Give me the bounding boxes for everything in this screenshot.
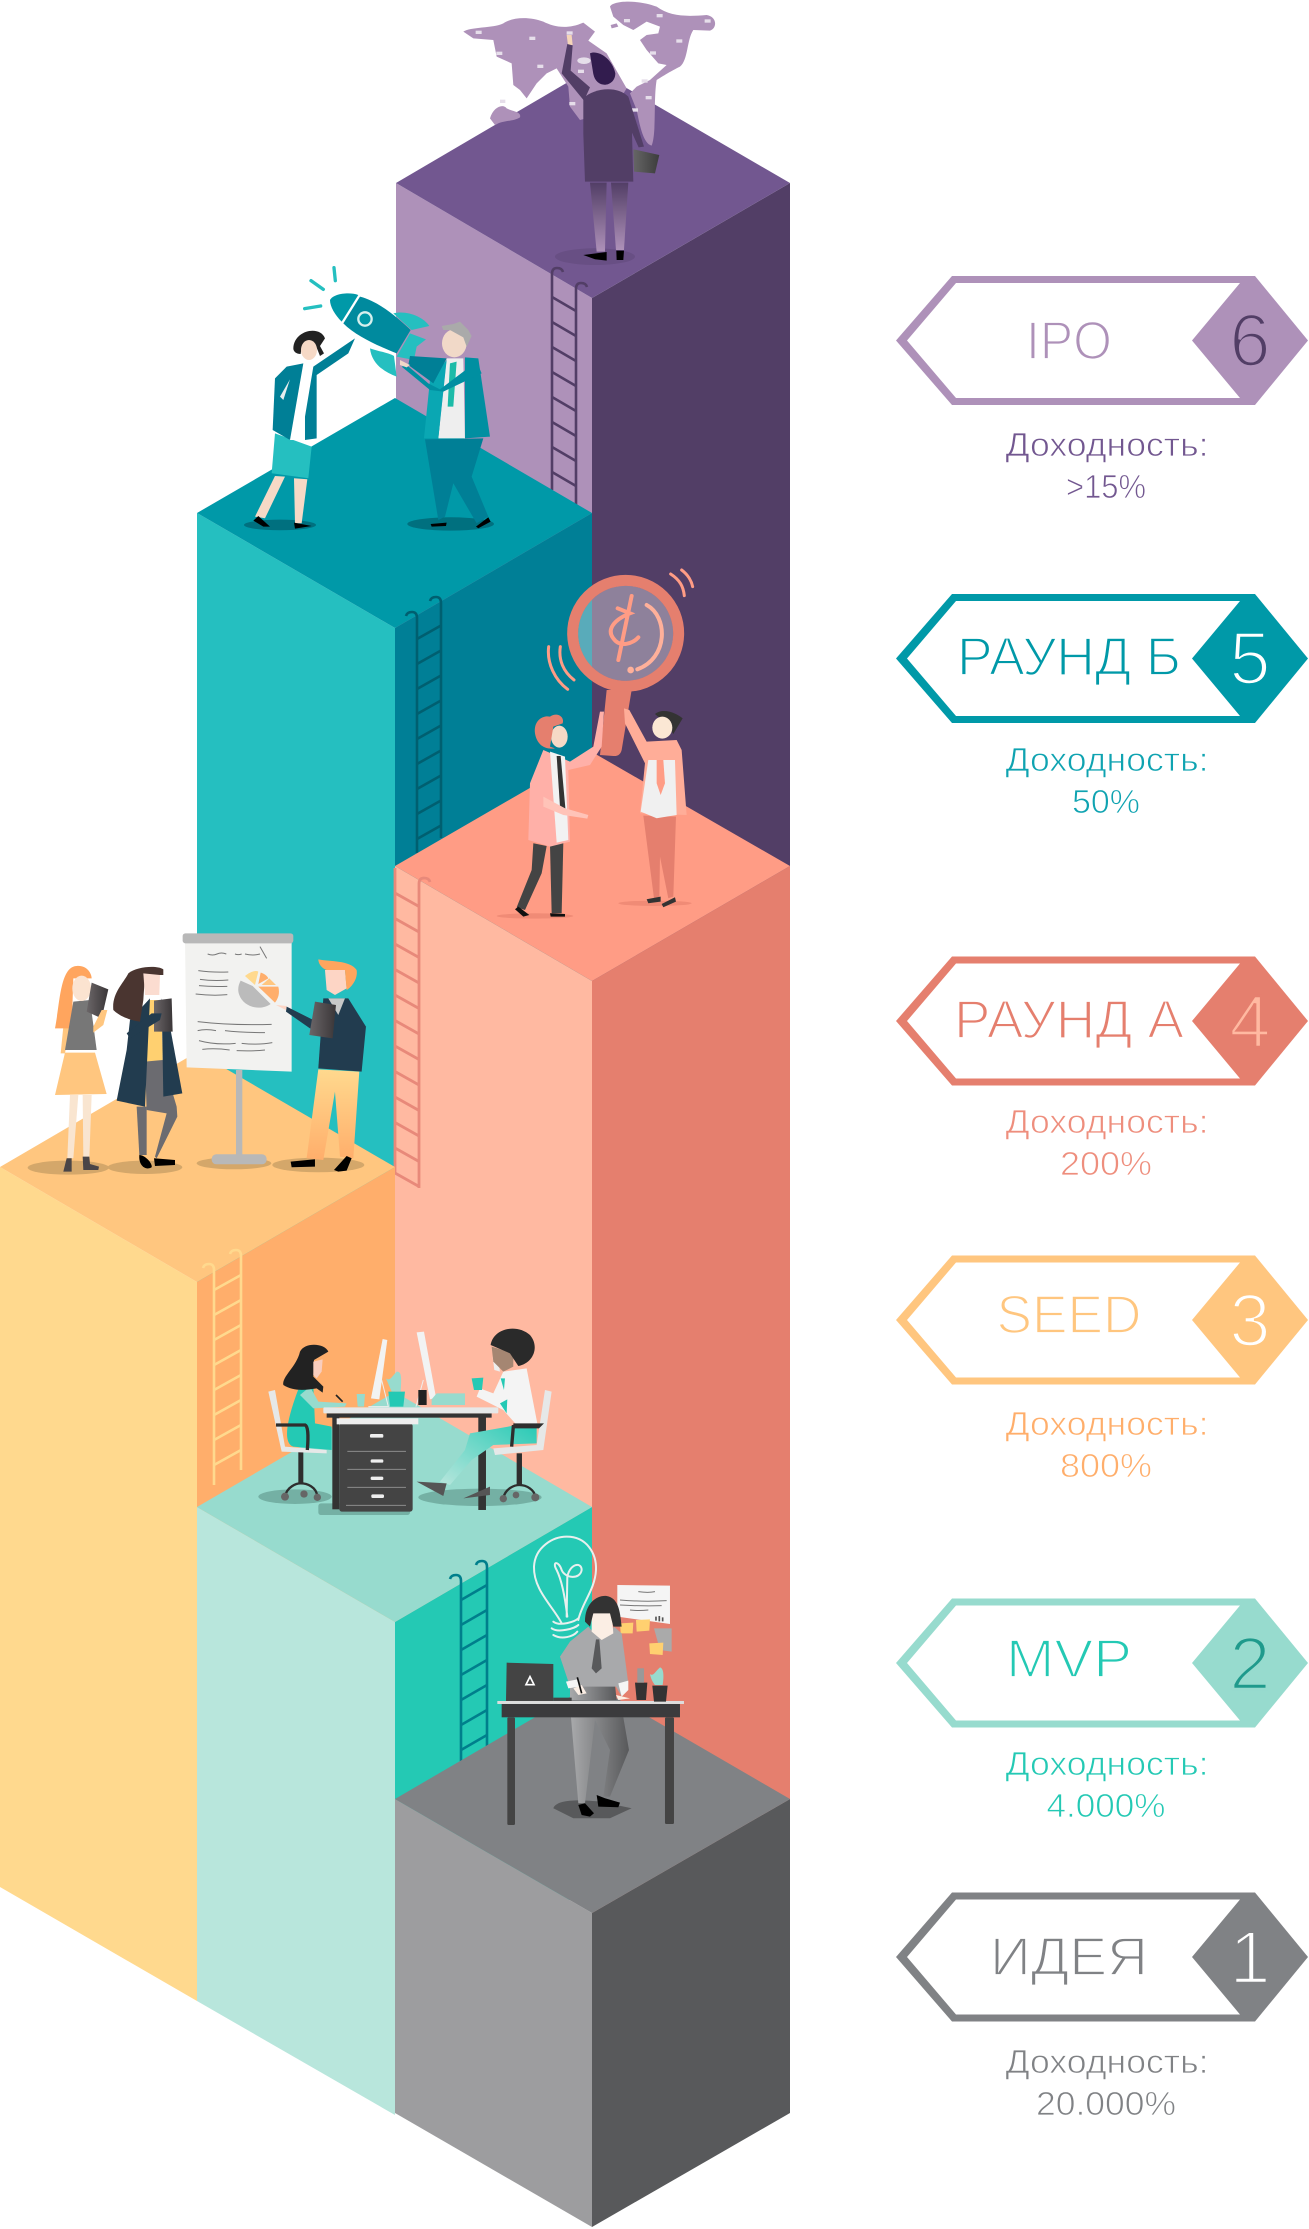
badge 3: seed bbox=[896, 1256, 1308, 1384]
return text: round B bbox=[1006, 741, 1208, 820]
illustration: team presentation on seed block bbox=[28, 933, 366, 1175]
return text: idea: Доходность: bbox=[1006, 2043, 1208, 2080]
badge 5: round B bbox=[896, 594, 1308, 723]
return text: round A: Доходность: bbox=[1006, 1103, 1208, 1140]
badge 2: MVP bbox=[896, 1598, 1308, 1728]
ground shadows bbox=[28, 1157, 364, 1175]
woman figure bbox=[555, 35, 659, 265]
man standing at desk bbox=[560, 1596, 630, 1817]
wall notes bbox=[617, 1585, 672, 1655]
badge 5: round B: 5 bbox=[1229, 617, 1271, 700]
badge 1: idea: 1 bbox=[1229, 1916, 1271, 1999]
badge 6: IPO: IPO bbox=[1026, 311, 1112, 371]
left worker and chair bbox=[268, 1345, 347, 1501]
presenter man bbox=[276, 959, 366, 1172]
block 2: MVP mint column bbox=[197, 1392, 592, 2115]
return text: seed: 800% bbox=[1060, 1447, 1152, 1484]
badge 5: round B: РАУНД Б bbox=[957, 627, 1181, 687]
badge 3: seed: SEED bbox=[996, 1285, 1142, 1345]
flip chart bbox=[183, 933, 293, 1164]
map flags bbox=[476, 14, 711, 112]
woman in dark coat bbox=[113, 967, 182, 1168]
badge 6: IPO bbox=[896, 276, 1308, 405]
badge 2: MVP: MVP bbox=[1006, 1629, 1132, 1689]
ladder on mint column bbox=[450, 1561, 487, 1770]
shadow under man bbox=[553, 1800, 632, 1818]
man bbox=[400, 322, 494, 531]
badge 2: MVP: 2 bbox=[1229, 1622, 1271, 1705]
badge 4: round A: 4 bbox=[1229, 980, 1271, 1063]
right man bbox=[618, 708, 692, 907]
return text: idea: 20.000% bbox=[1036, 2085, 1176, 2122]
left man bbox=[497, 712, 604, 919]
return text: seed: Доходность: bbox=[1006, 1405, 1208, 1442]
world map bbox=[463, 2, 715, 146]
ladder on salmon column bbox=[395, 868, 430, 1188]
desk with drawer bbox=[323, 1332, 498, 1512]
badge 4: round A bbox=[896, 956, 1308, 1086]
return text: seed bbox=[1006, 1405, 1208, 1484]
illustration: man with idea at desk on idea block bbox=[497, 1537, 684, 1825]
return text: MVP: 4.000% bbox=[1046, 1787, 1166, 1824]
return text: round A: 200% bbox=[1060, 1145, 1152, 1182]
block 6: IPO purple column bbox=[396, 68, 790, 1000]
rocket with rays bbox=[305, 268, 429, 377]
return text: round A bbox=[1006, 1103, 1208, 1182]
light bulb bbox=[534, 1537, 596, 1637]
badge 3: seed: 3 bbox=[1229, 1279, 1271, 1362]
illustration: office desk with two workers on MVP block bbox=[258, 1329, 552, 1515]
right worker and chair bbox=[417, 1329, 552, 1502]
return text: idea bbox=[1006, 2043, 1208, 2122]
ladder on purple column bbox=[552, 268, 587, 505]
block 3: seed yellow column bbox=[0, 1052, 395, 2001]
block 5: round B teal column bbox=[197, 398, 592, 1300]
floor shadows bbox=[258, 1489, 542, 1515]
woman bbox=[244, 331, 355, 530]
badge 1: idea bbox=[896, 1892, 1308, 2022]
ladder on yellow column bbox=[203, 1250, 241, 1485]
desk with laptop bbox=[497, 1663, 684, 1825]
return text: IPO: Доходность: bbox=[1006, 426, 1208, 463]
block 4: round A salmon column bbox=[395, 752, 790, 1913]
ladder on teal column bbox=[406, 597, 441, 853]
return text: IPO: >15% bbox=[1066, 468, 1146, 505]
return text: round B: Доходность: bbox=[1006, 741, 1208, 778]
illustration: woman at world map on IPO block bbox=[463, 2, 715, 265]
badge 1: idea: ИДЕЯ bbox=[990, 1927, 1148, 1987]
return text: MVP bbox=[1006, 1745, 1208, 1824]
return text: round B: 50% bbox=[1072, 783, 1140, 820]
illustration: two people with magnifier on round A block bbox=[497, 570, 693, 919]
woman with tablet bbox=[55, 966, 108, 1172]
block 1: idea gray column bbox=[395, 1684, 790, 2227]
return text: IPO bbox=[1006, 426, 1208, 505]
magnifier bbox=[548, 570, 693, 756]
return text: MVP: Доходность: bbox=[1006, 1745, 1208, 1782]
illustration: two people launching a rocket on round B block bbox=[244, 268, 494, 531]
badge 6: IPO: 6 bbox=[1229, 299, 1271, 382]
badge 4: round A: РАУНД А bbox=[954, 990, 1184, 1050]
